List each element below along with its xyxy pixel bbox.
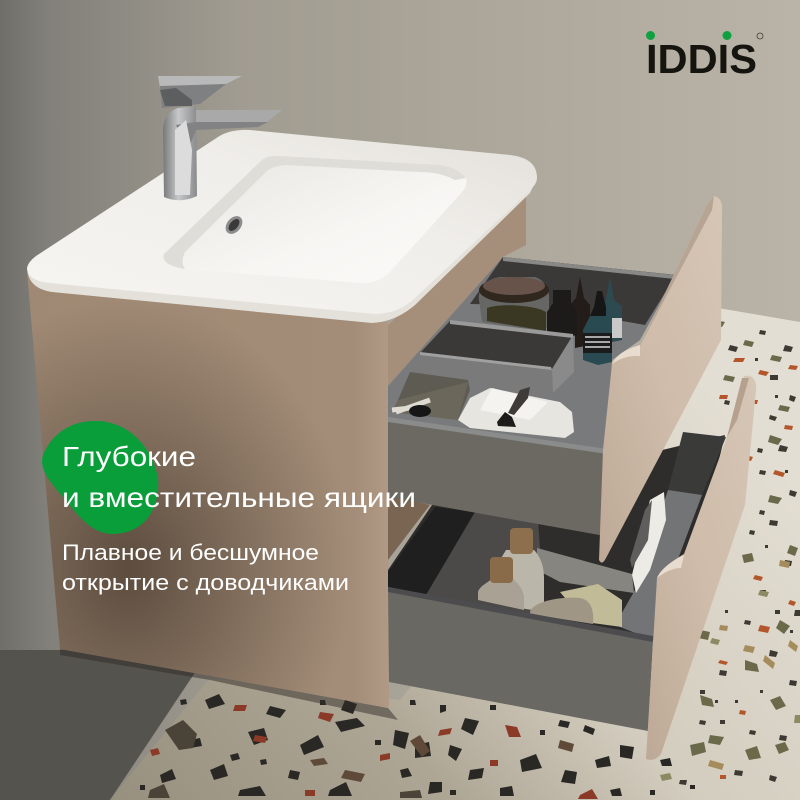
bottles — [478, 528, 544, 612]
green blob accent — [42, 421, 158, 534]
side wall — [388, 587, 653, 731]
upper drawer — [388, 196, 722, 563]
door — [599, 196, 722, 563]
faucet — [158, 76, 282, 200]
dropper bottles — [547, 277, 622, 365]
door — [646, 376, 756, 760]
interior — [388, 432, 726, 640]
heading: и вместительные ящики — [62, 482, 416, 513]
subheading — [62, 540, 349, 595]
chips: red brown — [150, 705, 598, 799]
logo: IDDIS: IDDIS — [646, 36, 757, 82]
drain overflow — [222, 213, 246, 237]
subheading: открытие с доводчиками — [62, 570, 349, 595]
chips: dark — [140, 680, 695, 796]
cabinet body — [27, 196, 526, 708]
interior back — [388, 257, 676, 452]
side wall — [388, 417, 607, 536]
lower drawer — [388, 376, 756, 760]
basin bowl — [163, 156, 466, 283]
cabinet shadow on floor — [60, 648, 398, 720]
countertop washbasin — [27, 130, 537, 323]
glass box — [392, 372, 470, 420]
heading: Глубокие — [62, 441, 196, 472]
chips: upper right floor — [679, 330, 800, 785]
jar — [479, 277, 549, 331]
divider tray — [405, 320, 574, 400]
top surface — [27, 130, 537, 314]
front lip — [27, 178, 537, 323]
heading — [62, 441, 416, 513]
folded towels and razor — [458, 387, 574, 438]
brush and cup — [530, 584, 622, 627]
subheading: Плавное и бесшумное — [62, 540, 319, 565]
side panel — [27, 272, 389, 708]
towel — [537, 492, 666, 593]
terrazzo floor — [110, 308, 800, 800]
